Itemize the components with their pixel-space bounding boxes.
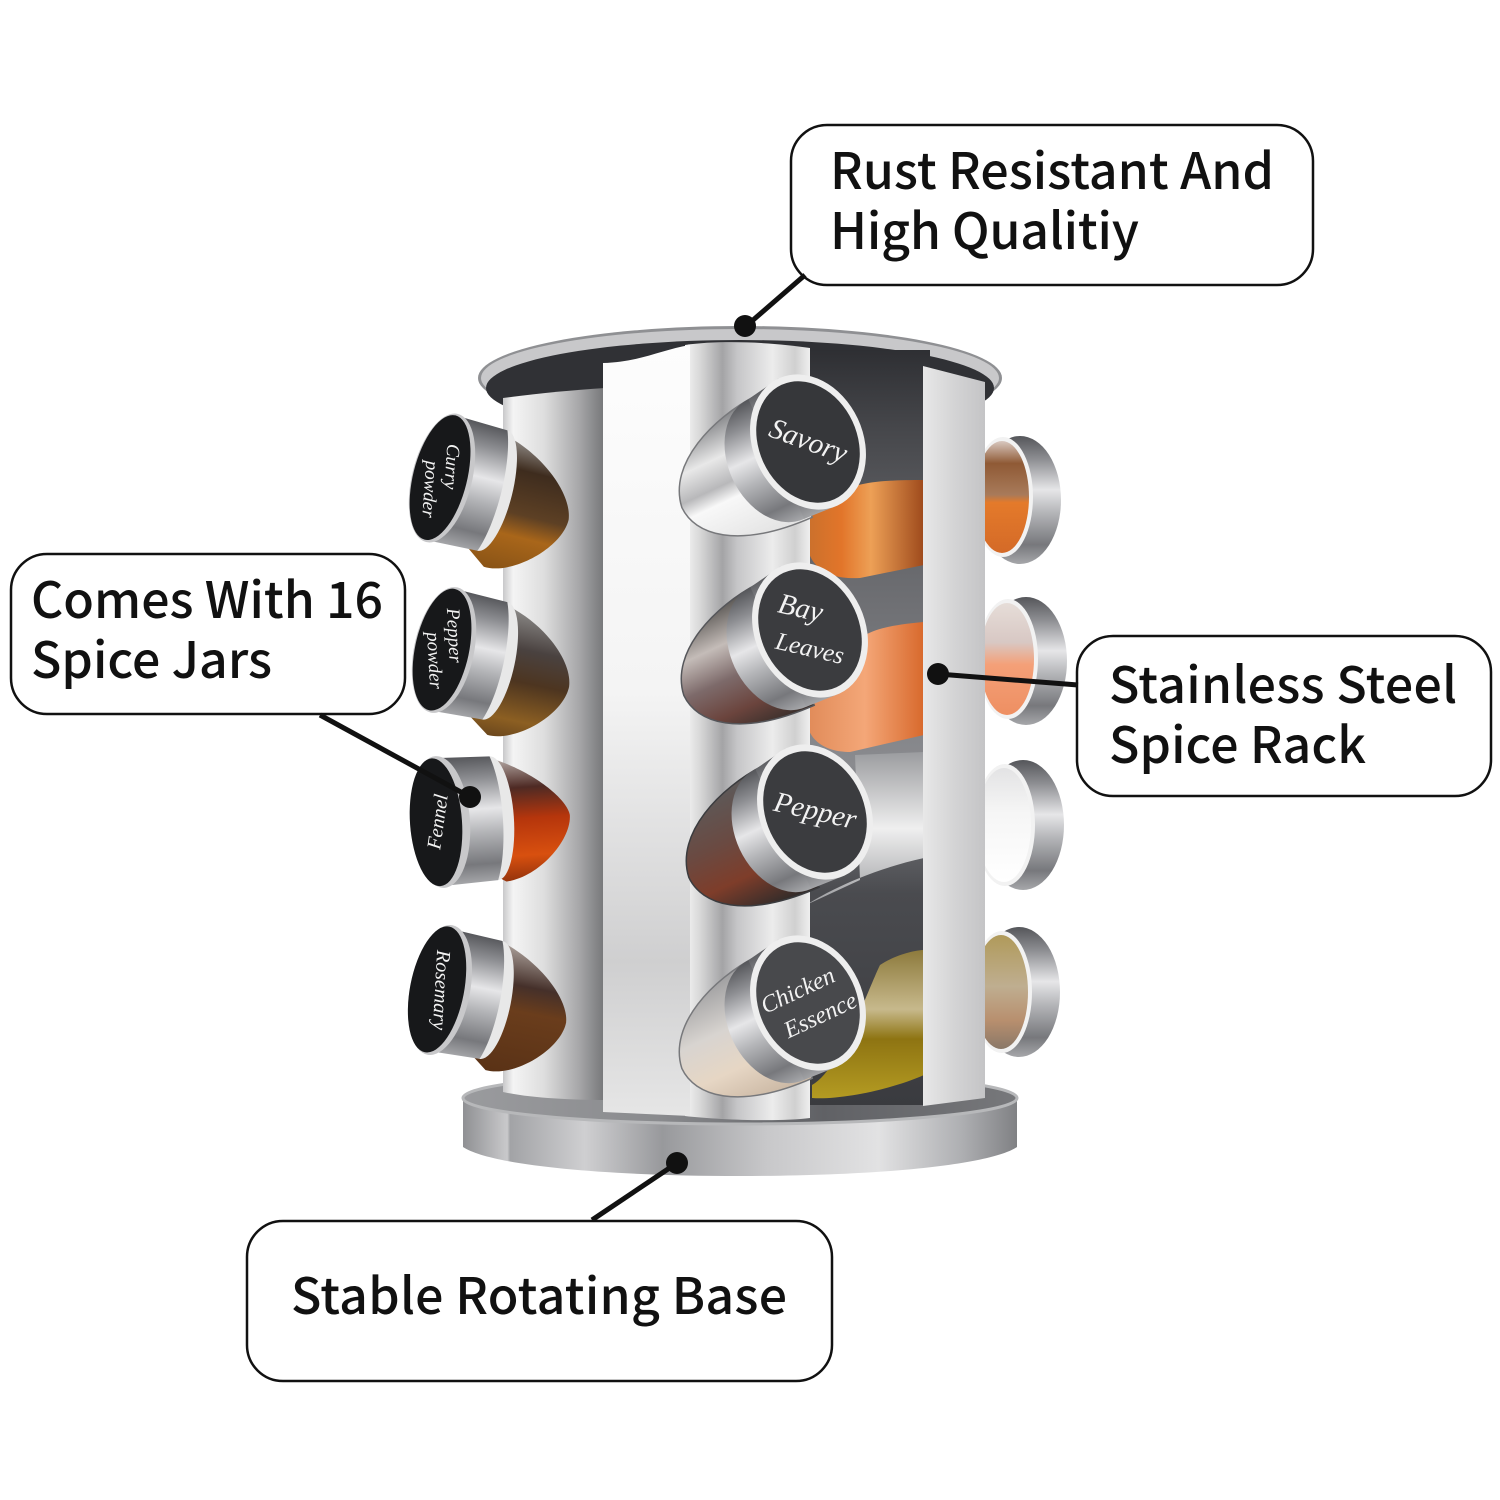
back jar: yellow spice	[812, 950, 924, 1098]
right jar 3	[975, 760, 1064, 890]
right side jars	[972, 436, 1067, 1057]
left column	[503, 388, 605, 1100]
center jar: pepper: Pepper	[770, 786, 860, 836]
callout: stainless steel: Stainless Steel	[1109, 646, 1457, 718]
center jar: bay leaves: Bay	[775, 588, 826, 629]
right jar 1	[973, 436, 1061, 564]
back jar: orange spice	[806, 480, 924, 578]
left jar: rosemary: Rosemary	[428, 949, 454, 1031]
left jar: curry powder: powder	[417, 458, 442, 519]
left jar: curry powder	[394, 407, 587, 584]
center jar: bay leaves	[652, 543, 889, 753]
back jars seen through the rack	[806, 480, 924, 1098]
left jar: fennel	[405, 747, 574, 890]
center jar: pepper	[657, 725, 894, 935]
right strap	[923, 366, 985, 1106]
arrow: rotating base pointer	[592, 1152, 688, 1220]
left jar: pepper powder: Pepper	[442, 607, 466, 664]
callout: comes with 16 spice jars: Spice Jars	[31, 621, 272, 693]
callout: stable rotating base	[247, 1221, 832, 1381]
right jar 4	[972, 927, 1060, 1057]
callout: rust resistant	[791, 125, 1313, 285]
left strap	[603, 345, 690, 1116]
center jar: bay leaves: Leaves	[772, 628, 847, 670]
rack interior behind jars	[800, 350, 930, 1105]
left jar: rosemary	[397, 919, 580, 1084]
center jar: chicken essence: Chicken	[757, 963, 839, 1019]
arrow: stainless steel pointer	[927, 663, 1078, 685]
arrow: spice jars pointer	[320, 715, 481, 808]
callout: rust resistant: High Qualitiy	[830, 192, 1139, 264]
back jar: pink salt	[806, 622, 924, 752]
left jar: curry powder: Curry	[439, 443, 463, 491]
top rim	[478, 326, 1002, 436]
center jar: savory: Savory	[765, 412, 852, 470]
center jar: chicken essence	[650, 916, 887, 1126]
callout: stable rotating base: Stable Rotating Base	[291, 1257, 787, 1329]
left jar: fennel: Fennel	[423, 792, 453, 852]
callout: comes with 16 spice jars: Comes With 16	[31, 561, 383, 633]
center column	[685, 342, 810, 1120]
callout: stainless steel	[1077, 636, 1491, 796]
spice rack product	[394, 326, 1067, 1176]
left jar: pepper powder: powder	[422, 630, 446, 690]
callout: rust resistant: Rust Resistant And	[830, 132, 1274, 204]
left jar: pepper powder	[399, 581, 584, 749]
callout: stainless steel: Spice Rack	[1109, 706, 1366, 778]
arrow: rust resistant pointer	[734, 275, 805, 337]
base plate	[463, 1072, 1017, 1176]
center jar: savory	[650, 355, 887, 565]
back jar: white salt	[806, 752, 924, 905]
callout: comes with 16 spice jars	[11, 554, 405, 714]
right jar 2	[978, 597, 1067, 725]
center jar: chicken essence: Essence	[779, 988, 861, 1044]
